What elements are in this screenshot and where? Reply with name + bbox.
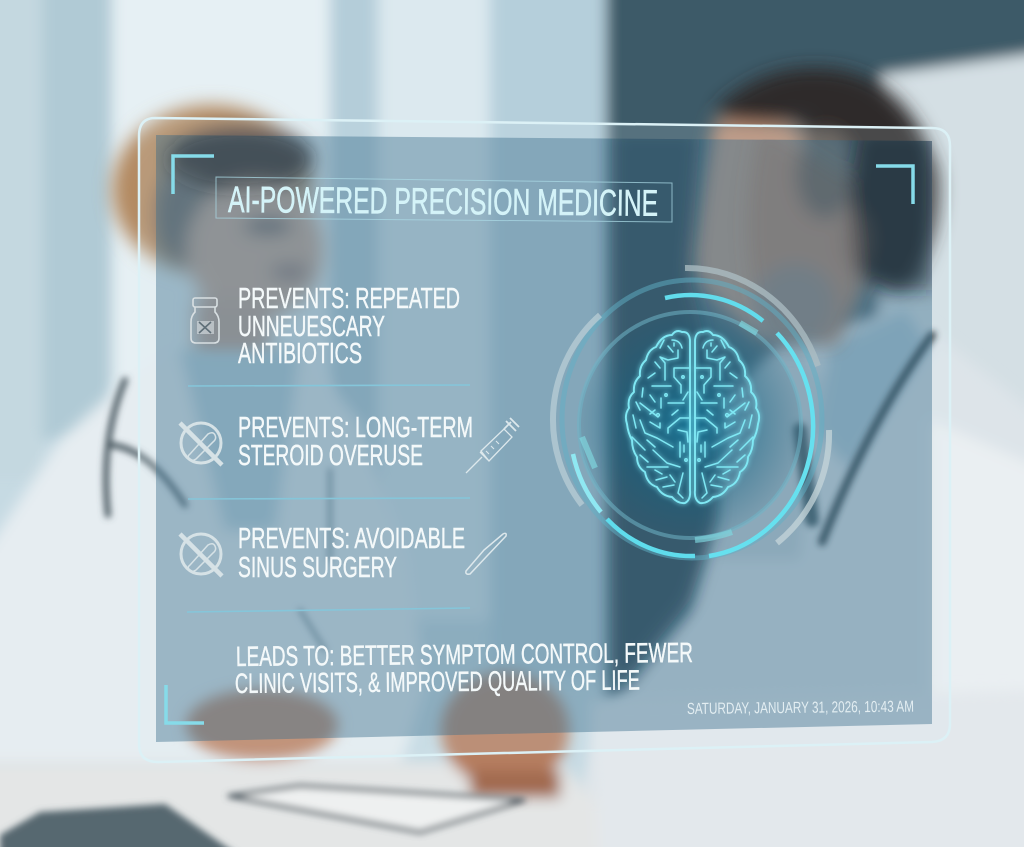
outcome text: CLINIC VISITS, & IMPROVED QUALITY OF LIFE [235, 664, 640, 699]
text: prevents sinus surgery [238, 523, 465, 584]
icon: scalpel [466, 533, 506, 574]
title box [216, 177, 672, 224]
inner tinted panel [156, 135, 932, 742]
outcome text: LEADS TO: BETTER SYMPTOM CONTROL, FEWER [236, 637, 693, 672]
text: prevents sinus surgery: SINUS SURGERY [238, 552, 397, 584]
icon: crossed-out pill [180, 534, 222, 576]
text: prevents repeated antibiotics: UNNEUESCARY [238, 311, 385, 343]
divider 3 [187, 608, 470, 612]
text: prevents steroid overuse: STEROID OVERUSE [238, 440, 423, 472]
panel shading over darker scene areas [168, 125, 932, 680]
item: avoidable sinus surgery [180, 523, 506, 584]
timestamp: SATURDAY, JANUARY 31, 2026, 10:43 AM [687, 699, 914, 718]
divider 2 [188, 498, 470, 499]
text: prevents steroid overuse [238, 412, 473, 472]
title: AI-POWERED PRECISION MEDICINE [228, 179, 658, 224]
icon: crossed-out pill [180, 423, 222, 465]
corner bracket: top right [876, 166, 913, 204]
corner bracket: top left [173, 156, 214, 194]
icon: circuit brain [626, 331, 759, 503]
text: prevents steroid overuse: PREVENTS: LONG-TERM [238, 412, 473, 444]
icon: syringe [466, 418, 519, 473]
text: prevents repeated antibiotics: ANTIBIOTICS [238, 338, 362, 370]
text: prevents repeated antibiotics [238, 283, 460, 370]
item: repeated unnecessary antibiotics [191, 283, 460, 370]
AI brain hologram [553, 268, 829, 558]
item: long-term steroid overuse [180, 412, 519, 473]
corner bracket: bottom left [166, 685, 204, 723]
icon: medicine bottle with cross [191, 298, 219, 343]
outer glass panel [139, 118, 950, 762]
divider 1 [188, 385, 470, 386]
hologram rings [553, 268, 829, 558]
outcome text [235, 637, 693, 699]
text: prevents sinus surgery: PREVENTS: AVOIDABLE [238, 523, 465, 555]
text: prevents repeated antibiotics: PREVENTS: REPEATED [238, 283, 460, 315]
